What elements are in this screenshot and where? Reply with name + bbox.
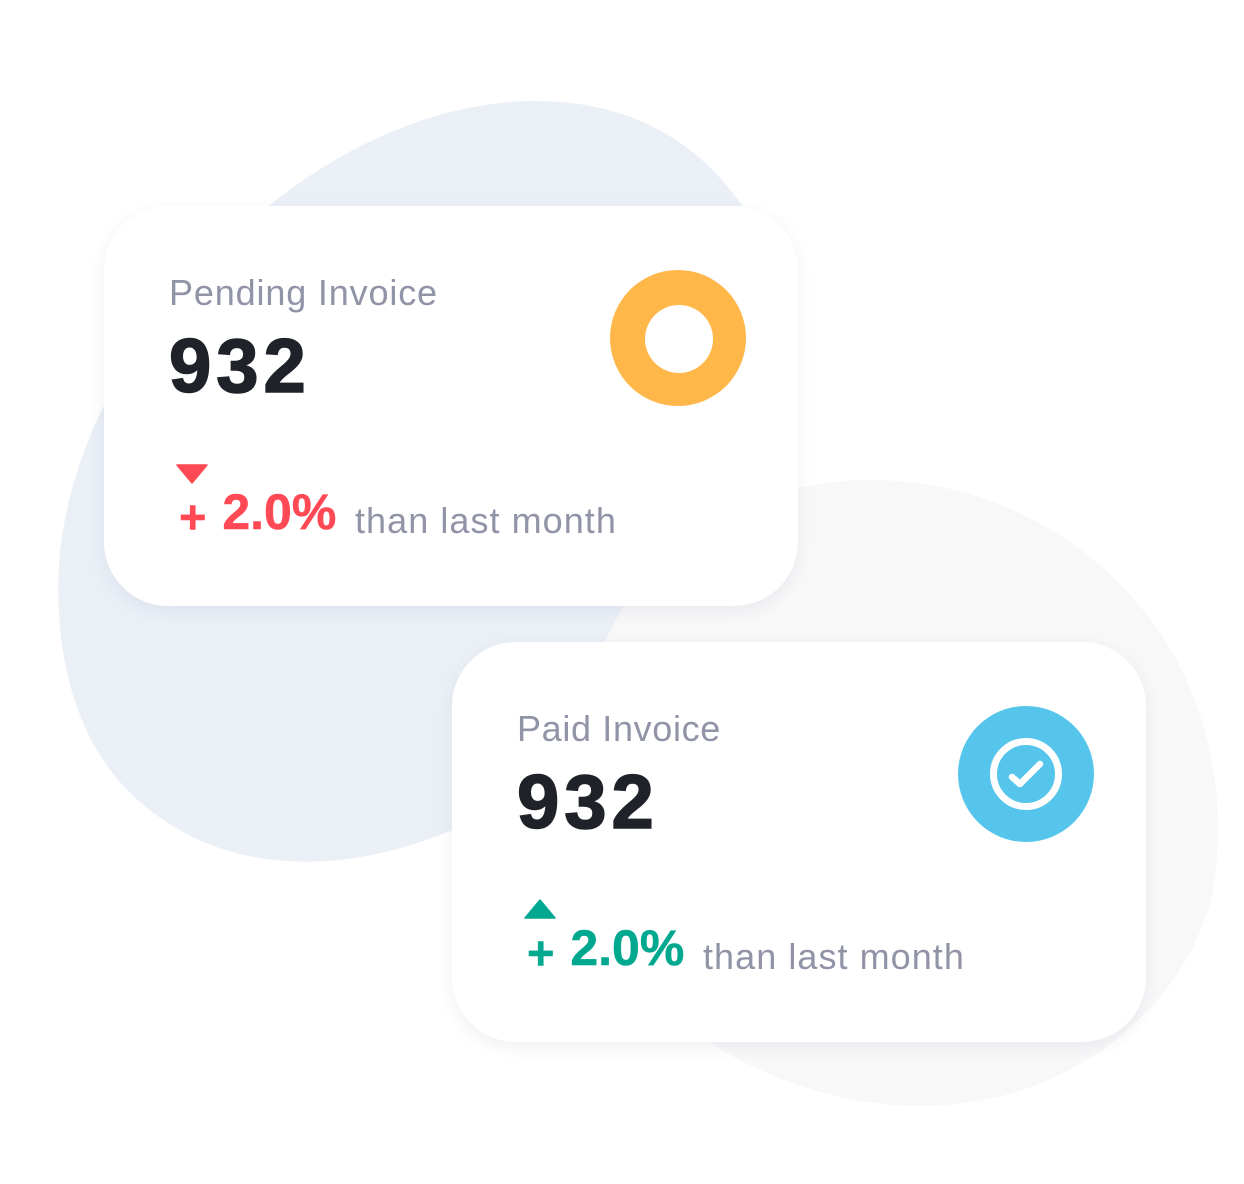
icon: blue check circle	[958, 706, 1094, 842]
text: than last month: than last month	[355, 500, 617, 541]
change: green percentage: + 2.0%	[527, 920, 684, 979]
value: pending count: 932	[169, 324, 311, 409]
heading: paid invoice: Paid Invoice	[517, 708, 721, 749]
heading: pending invoice: Pending Invoice	[169, 272, 438, 313]
panel: pending invoice card	[104, 206, 798, 606]
text: than last month: than last month	[703, 936, 965, 977]
value: paid count: 932	[517, 760, 659, 845]
blob: blue	[58, 101, 780, 862]
icon: green up triangle	[524, 899, 556, 919]
panel: paid invoice card	[452, 642, 1146, 1042]
blob: grey	[583, 480, 1218, 1106]
icon: red down triangle	[176, 464, 208, 484]
change: red percentage: + 2.0%	[179, 484, 336, 543]
icon: orange ring	[610, 270, 746, 406]
